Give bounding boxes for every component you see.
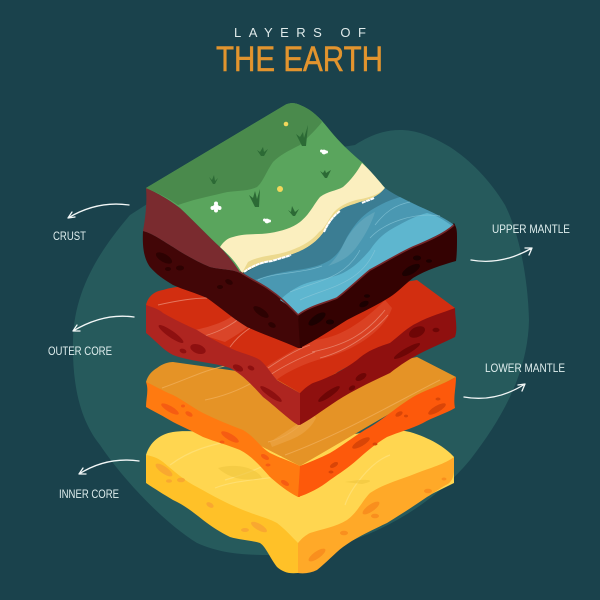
soil spots right (307, 256, 432, 328)
arrow: crust (68, 204, 129, 218)
title (216, 25, 383, 79)
arrow: lower mantle (464, 384, 525, 398)
soil spots left (154, 250, 277, 329)
arrow: inner core (79, 460, 139, 474)
label: crust (53, 204, 129, 243)
background blob (73, 130, 529, 555)
soil left face (143, 231, 302, 348)
label: upper mantle: UPPER MANTLE (492, 224, 570, 236)
title line 1: LAYERS OF (234, 25, 366, 40)
label: inner core (59, 460, 139, 501)
label: outer core: OUTER CORE (48, 346, 112, 358)
water mid band (255, 197, 454, 315)
label: upper mantle (471, 224, 570, 261)
label: inner core: INNER CORE (59, 489, 119, 501)
label: lower mantle (464, 363, 565, 398)
layer: crust (143, 103, 457, 348)
water light band (280, 213, 452, 315)
arrow: upper mantle (471, 248, 532, 261)
dark grass band (146, 103, 322, 205)
wet sand (242, 188, 385, 273)
title line 2: THE EARTH (216, 40, 383, 79)
label: lower mantle: LOWER MANTLE (485, 363, 565, 375)
soil right face (298, 223, 457, 348)
label: outer core (48, 316, 134, 358)
water (243, 188, 454, 315)
sand (220, 163, 385, 273)
water sheen (328, 212, 375, 266)
layer: outer core (red) (146, 280, 456, 425)
label: crust: CRUST (53, 231, 86, 243)
grass (146, 103, 385, 272)
layer: lower mantle (orange) (146, 357, 456, 497)
arrow: outer core (73, 316, 134, 331)
rim (240, 225, 454, 315)
layer: inner core (yellow) (146, 430, 454, 573)
flowers (210, 122, 328, 223)
cliff face (143, 188, 240, 273)
foam (244, 198, 374, 272)
grass tufts (209, 125, 331, 216)
